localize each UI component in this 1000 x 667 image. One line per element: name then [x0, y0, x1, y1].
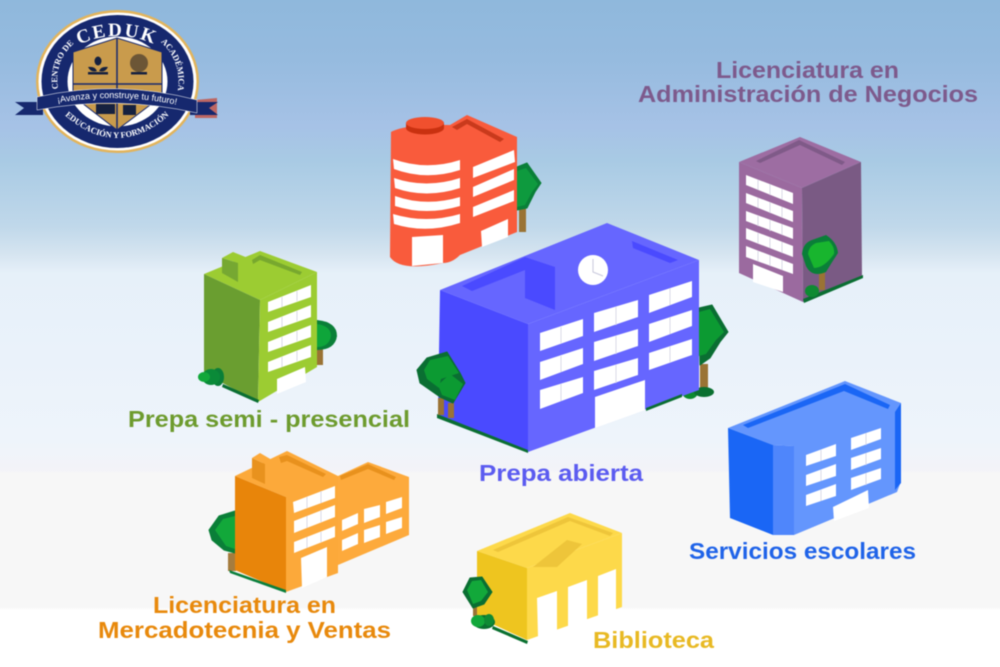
building: green [198, 251, 337, 403]
label: Prepa abierta: Prepa abierta [479, 460, 644, 486]
label: Biblioteca: Biblioteca [593, 627, 715, 653]
label: Prepa semi - presencial: Prepa semi - presencial [128, 406, 410, 432]
logo: CEDUK crest: CEDUK [76, 22, 157, 44]
label: Licenciatura en Mercadotecnia y Ventas [98, 592, 391, 643]
tree behind red building [517, 163, 541, 232]
label: Licenciatura en Mercadotecnia y Ventas: Mercadotecnia y Ventas [98, 617, 391, 643]
building: main blue-violet [417, 223, 728, 453]
label: Servicios escolares: Servicios escolares [689, 538, 916, 564]
shield icon: globe [130, 54, 148, 74]
shield icon: plant [88, 56, 108, 74]
building: purple [739, 137, 863, 303]
tree on purple building [802, 235, 838, 297]
building: yellow [463, 513, 622, 644]
tree on yellow building [463, 577, 495, 629]
logo: CEDUK crest: ¡Avanza y construye tu futuro! [57, 92, 178, 106]
label: Licenciatura en Administración de Negocios: Administración de Negocios [638, 81, 978, 107]
logo: CEDUK crest: EDUCACIÓN Y FORMACIÓN [64, 110, 169, 139]
logo: CEDUK crest [14, 9, 218, 154]
tree right of main building [682, 305, 728, 399]
label: Licenciatura en Mercadotecnia y Ventas: Licenciatura en [153, 592, 336, 618]
building: bright blue [728, 381, 901, 535]
logo: CEDUK crest: CENTRO DE [50, 40, 74, 90]
label: Licenciatura en Administración de Negocios: Licenciatura en [716, 57, 899, 83]
bush on green building [198, 368, 224, 386]
clock [578, 255, 608, 285]
tree behind green building [317, 320, 337, 365]
building: red [390, 115, 541, 266]
tree left of main building [417, 352, 465, 418]
label: Licenciatura en Administración de Negocios [638, 57, 978, 107]
building: orange [209, 451, 409, 593]
logo: CEDUK crest: ACADÉMICA [160, 39, 185, 91]
tree behind orange building [209, 511, 236, 571]
